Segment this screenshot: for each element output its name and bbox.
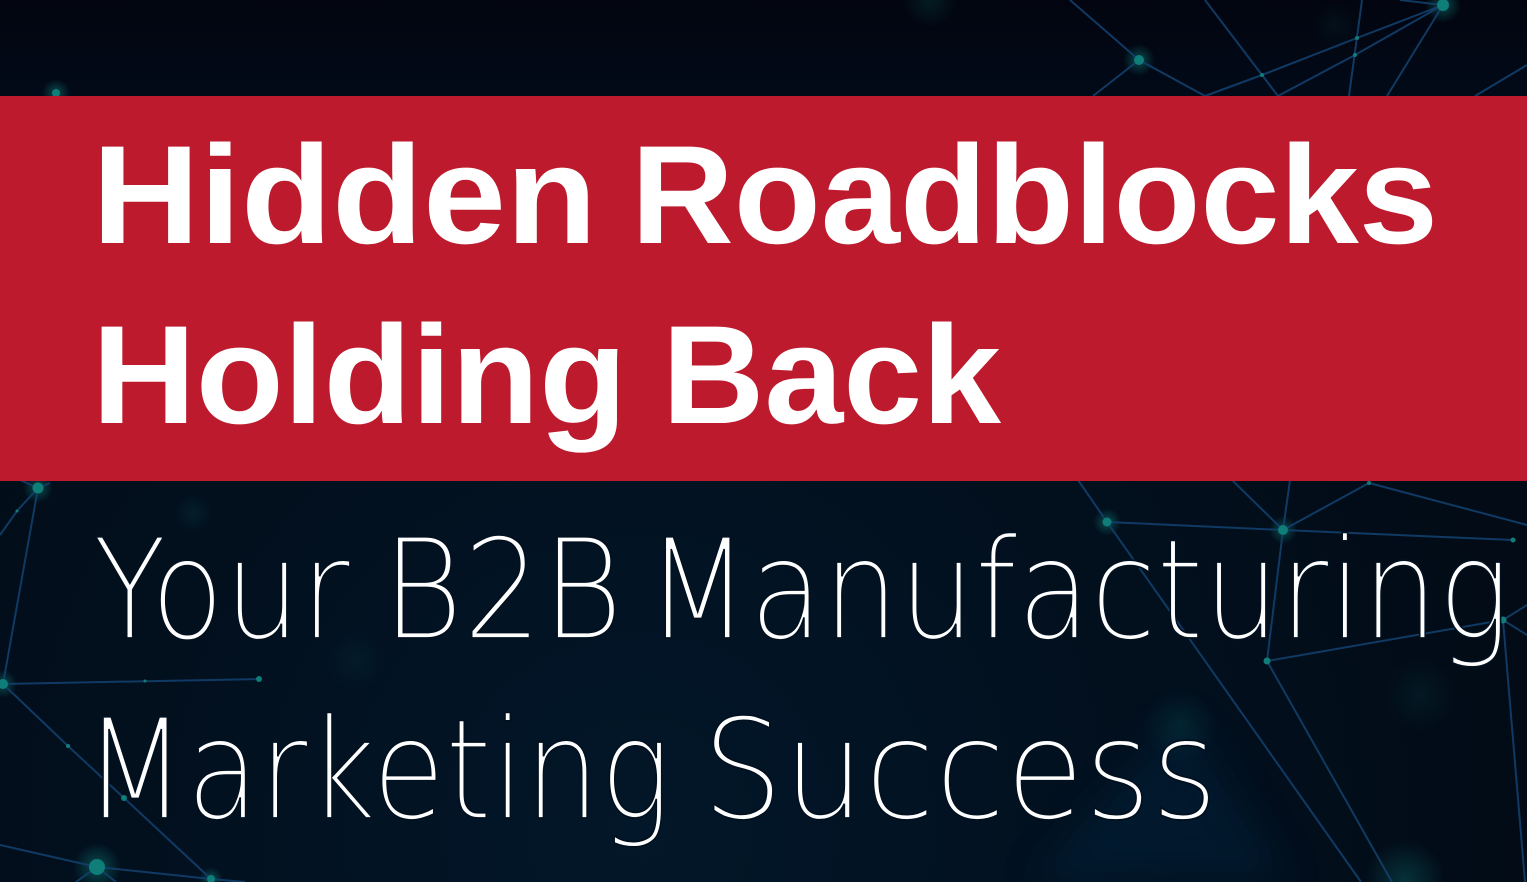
subtitle: thin headline: Your bbox=[93, 509, 351, 671]
subtitle: thin headline: Success bbox=[702, 689, 1218, 851]
title: bold headline: Back bbox=[662, 296, 1001, 453]
title: bold headline bbox=[92, 116, 1438, 453]
title: bold headline: Hidden bbox=[92, 116, 597, 273]
title banner: red band bbox=[0, 96, 1527, 481]
subtitle: thin headline: Marketing bbox=[84, 689, 671, 851]
subtitle: thin headline bbox=[84, 509, 1510, 851]
title: bold headline: Holding bbox=[92, 296, 627, 453]
subtitle: thin headline: B2B bbox=[382, 509, 623, 671]
title: bold headline: Roadblocks bbox=[631, 116, 1438, 273]
